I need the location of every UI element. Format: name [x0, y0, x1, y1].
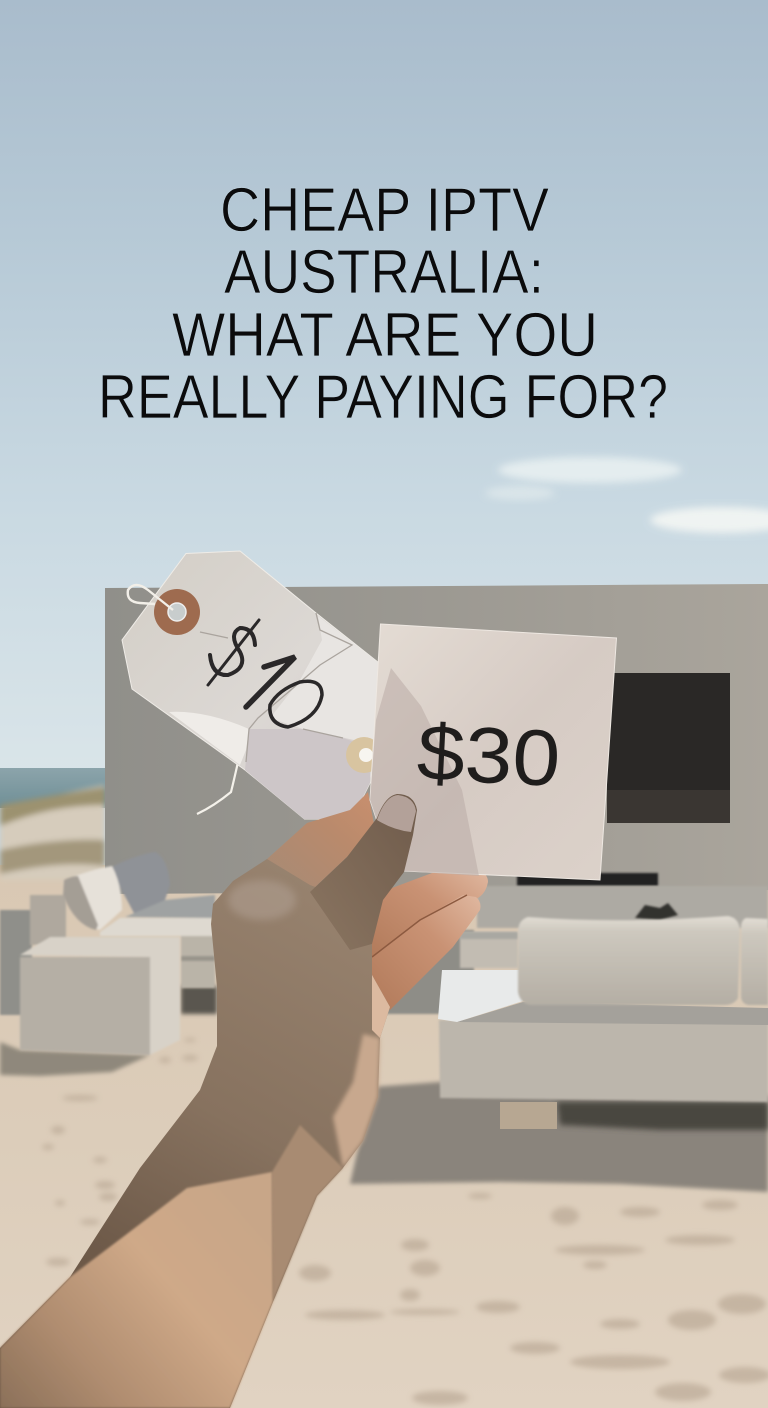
arm and palm silhouette: [0, 859, 390, 1408]
index finger: [267, 792, 376, 892]
right sofa: [350, 916, 768, 1192]
thumb body: [310, 794, 417, 950]
thumb nail: [377, 795, 416, 832]
sea horizon: [0, 768, 110, 808]
title: REALLY PAYING FOR?: [98, 363, 668, 432]
title: [98, 176, 668, 432]
left concrete block: [20, 937, 180, 1055]
title: WHAT ARE YOU: [172, 301, 598, 370]
media bench: [384, 873, 768, 1014]
$30 price: $30: [415, 707, 562, 803]
sofa front: [181, 936, 215, 988]
left sofa: [63, 852, 215, 988]
shaded lower section: [245, 729, 372, 819]
sunlit corner: [438, 970, 523, 1022]
grey cushion: [110, 852, 170, 915]
sand ground: [0, 865, 768, 1408]
clouds: [485, 457, 768, 533]
price tag $10: [122, 551, 382, 819]
lit forearm: [0, 1172, 273, 1408]
shadow under left furniture: [0, 1042, 150, 1076]
string from torn tag: [197, 762, 238, 814]
lower finger: [372, 895, 480, 1010]
seat surface: [457, 1002, 768, 1025]
title: CHEAP IPTV: [220, 176, 550, 245]
sunlit torn patch: [169, 712, 249, 765]
thumb: [310, 794, 417, 950]
seat: [125, 895, 215, 918]
sofa leg: [500, 1102, 557, 1129]
back-left concrete cube: [0, 895, 66, 1015]
brighter torn section: [270, 616, 379, 745]
square card $30: [370, 624, 616, 880]
crease between fingers: [372, 895, 467, 957]
concrete wall: [105, 584, 768, 894]
title: AUSTRALIA:: [224, 238, 544, 307]
wrist light wedge: [272, 1125, 343, 1302]
lit edge of palm: [372, 975, 390, 1038]
fingers behind the card: [372, 870, 488, 1010]
sofa shadow: [350, 1082, 768, 1192]
wall mounted TV: [607, 673, 730, 823]
lower eyelet: [346, 737, 382, 773]
sky background: [0, 0, 768, 780]
tag paper: [122, 551, 379, 819]
tag creases: [200, 613, 352, 762]
wrinkled heel of the palm: [228, 880, 296, 920]
top eyelet: [154, 589, 200, 635]
handwritten $10: [208, 620, 322, 727]
upper finger: [372, 870, 488, 960]
forearm and palm: [0, 792, 390, 1408]
shadow on card: [370, 668, 479, 876]
dune with grass: [0, 785, 105, 880]
sofa base: [439, 1020, 768, 1102]
footprints in sand: [42, 1038, 768, 1405]
white cushion: [63, 866, 122, 930]
tag string loop: [128, 585, 173, 610]
card paper: [370, 624, 616, 880]
lit thenar area: [333, 1034, 380, 1168]
back cushions: [518, 916, 740, 1005]
